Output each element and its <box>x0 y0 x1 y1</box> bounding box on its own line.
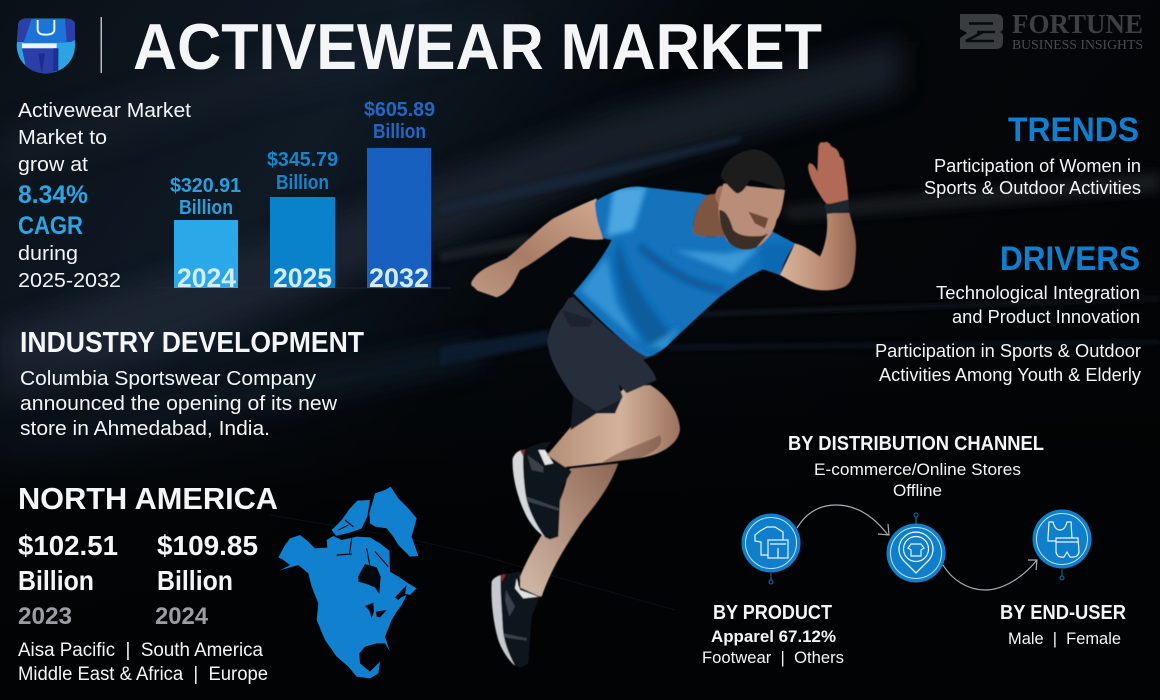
bar 2025: $345.79 <box>267 149 338 171</box>
raised arm <box>780 213 856 290</box>
shorts <box>547 297 660 430</box>
bar 2032: 2032 <box>369 263 429 293</box>
panel: industry development: announced the opening of its new <box>20 393 338 415</box>
bar 2024 <box>170 175 241 293</box>
bottom shoe <box>491 572 540 668</box>
shirt <box>567 180 800 360</box>
bar 2024: Billion <box>179 197 233 219</box>
bar 2032: Billion <box>373 121 426 143</box>
panel: by distribution channel: E-commerce/Online Stores <box>814 460 1021 479</box>
panel: North America: 2024 <box>155 603 209 630</box>
watch <box>824 199 849 214</box>
top shoe <box>513 442 572 539</box>
panel: trends: Participation of Women in <box>934 156 1141 176</box>
bar 2032 <box>364 99 435 293</box>
panel: North America: Billion <box>157 565 233 596</box>
header divider <box>100 17 102 73</box>
panel: by product <box>702 602 844 667</box>
panel: North America: Middle East & Africa | Europe <box>18 664 268 685</box>
panel: drivers: Participation in Sports & Outdoor <box>875 341 1141 361</box>
logo: Fortune Business Insights: FORTUNE <box>1012 9 1143 39</box>
title: ACTIVEWEAR MARKET <box>133 10 822 83</box>
panel: by end-user: BY END-USER <box>1000 602 1127 624</box>
CAGR text block: 8.34% <box>18 181 88 209</box>
bar chart: market size <box>154 99 450 293</box>
icon: distribution pin <box>886 513 946 582</box>
CAGR text block: during <box>18 243 78 265</box>
panel: North America: $109.85 <box>157 530 258 561</box>
panel: industry development <box>20 327 364 440</box>
panel: trends <box>924 111 1141 198</box>
panel: drivers: Activities Among Youth & Elderly <box>879 365 1141 385</box>
CAGR text block: CAGR <box>18 212 83 240</box>
panel: trends: Sports & Outdoor Activities <box>924 178 1141 198</box>
map: North America <box>278 487 418 678</box>
bar 2024: 2024 <box>177 263 236 293</box>
CAGR text block: 2025-2032 <box>18 270 121 292</box>
panel: drivers: and Product Innovation <box>952 307 1140 327</box>
CAGR text block: grow at <box>18 154 88 176</box>
arrow: distribution to end-user <box>943 560 1037 590</box>
panel: by product: Apparel 67.12% <box>711 627 836 646</box>
eye <box>748 212 768 228</box>
bar 2032: $605.89 <box>364 99 435 121</box>
icon: product <box>742 514 800 584</box>
panel: drivers: DRIVERS <box>1000 240 1140 278</box>
CAGR text block: Market to <box>18 127 107 149</box>
arrow: product to distribution <box>797 505 889 535</box>
panel: industry development: INDUSTRY DEVELOPMENT <box>20 327 364 359</box>
panel: North America: Billion <box>18 565 94 596</box>
icon: end-user <box>1032 510 1092 580</box>
hair <box>721 149 785 193</box>
panel: by end-user: Male | Female <box>1008 629 1121 648</box>
panel: by product: BY PRODUCT <box>713 602 832 624</box>
bar 2025: Billion <box>276 172 329 194</box>
neck <box>693 193 730 237</box>
left arm <box>471 198 603 297</box>
beard <box>719 210 768 250</box>
panel: trends: TRENDS <box>1008 111 1139 149</box>
logo: Fortune Business Insights <box>960 9 1143 53</box>
panel: North America: Aisa Pacific | South America <box>18 640 263 661</box>
bar 2025: 2025 <box>273 263 332 293</box>
logo: Fortune Business Insights: BUSINESS INSIGHTS <box>1012 38 1143 53</box>
panel: drivers <box>875 240 1141 385</box>
panel: North America <box>18 481 278 685</box>
raised hand <box>808 142 849 204</box>
bar 2024: $320.91 <box>170 175 241 197</box>
panel: by distribution channel: Offline <box>893 481 942 500</box>
far lower leg <box>520 463 618 597</box>
CAGR text block: Activewear Market <box>18 100 191 122</box>
runner illustration <box>471 142 856 668</box>
panel: North America: 2023 <box>18 603 72 630</box>
panel: by end-user <box>1000 602 1127 648</box>
panel: drivers: Technological Integration <box>936 283 1140 303</box>
panel: by distribution channel: BY DISTRIBUTION CHANNEL <box>788 433 1044 455</box>
near thigh <box>547 385 680 467</box>
panel: industry development: store in Ahmedabad, India. <box>20 418 270 440</box>
panel: industry development: Columbia Sportswear Company <box>20 368 316 390</box>
ear <box>715 186 729 206</box>
panel: by distribution channel <box>788 433 1044 500</box>
bar 2025 <box>267 149 338 293</box>
panel: North America: NORTH AMERICA <box>18 481 278 516</box>
header icon: activewear badge <box>17 19 77 74</box>
panel: by product: Footwear | Others <box>702 648 844 667</box>
CAGR text block <box>18 100 191 292</box>
panel: North America: $102.51 <box>18 530 118 561</box>
face <box>718 183 785 250</box>
